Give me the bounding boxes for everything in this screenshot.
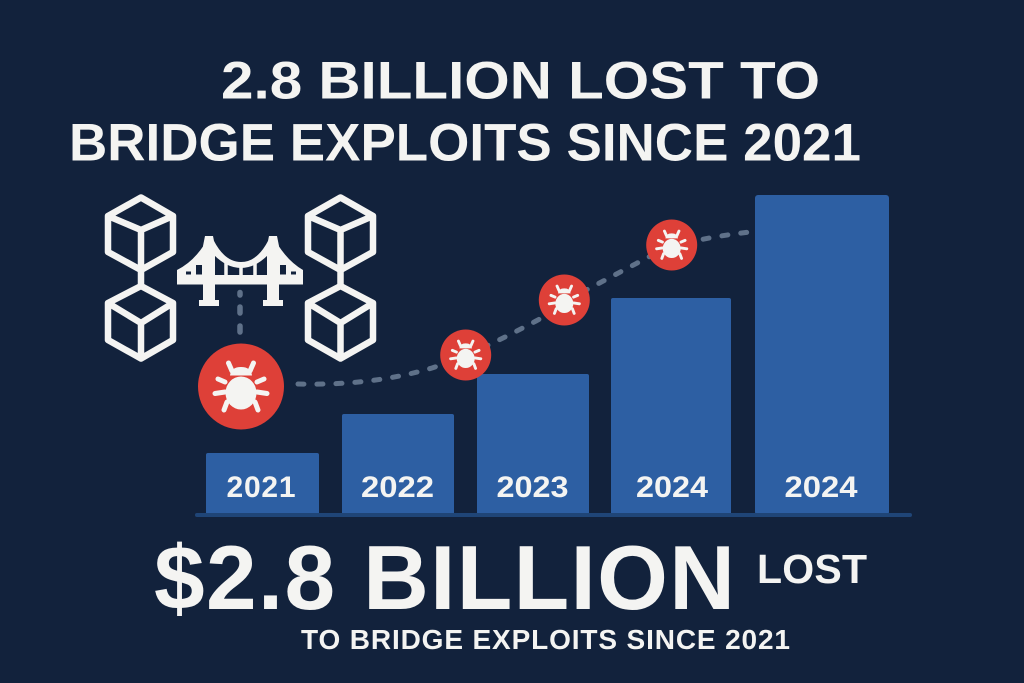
icon: right blockchain cubes — [308, 198, 373, 358]
dashed trend line — [298, 232, 750, 384]
headline: 2.8 BILLION LOST TO — [221, 52, 820, 110]
bar 2022: 2022 — [361, 471, 434, 504]
bar 2021 — [206, 453, 319, 515]
bar 2021: 2021 — [226, 471, 296, 504]
icon: left blockchain cubes — [108, 198, 173, 358]
headline: BRIDGE EXPLOITS SINCE 2021 — [69, 114, 861, 172]
icon: bug marker 3 — [539, 274, 590, 326]
icon: bug marker 4 — [646, 220, 697, 270]
big statistic: $2.8 BILLION — [154, 528, 735, 629]
icon: bug marker 2 — [440, 330, 491, 380]
bar 2022 — [342, 414, 454, 515]
bar 2024 tallest: 2024 — [784, 471, 858, 504]
icon: bridge — [177, 236, 303, 306]
headline — [69, 52, 861, 172]
bar 2024: 2024 — [636, 471, 708, 504]
baseline — [195, 513, 912, 517]
label: lost: LOST — [757, 546, 867, 592]
bar 2023: 2023 — [496, 471, 568, 504]
bar 2024 tallest — [755, 195, 889, 515]
icon: large bug marker — [198, 344, 284, 430]
bar 2024 — [611, 298, 731, 515]
bar 2023 — [477, 374, 589, 515]
dashed connector from bridge to bug — [237, 292, 243, 332]
bar chart — [195, 195, 912, 517]
subheading: TO BRIDGE EXPLOITS SINCE 2021 — [301, 624, 790, 655]
